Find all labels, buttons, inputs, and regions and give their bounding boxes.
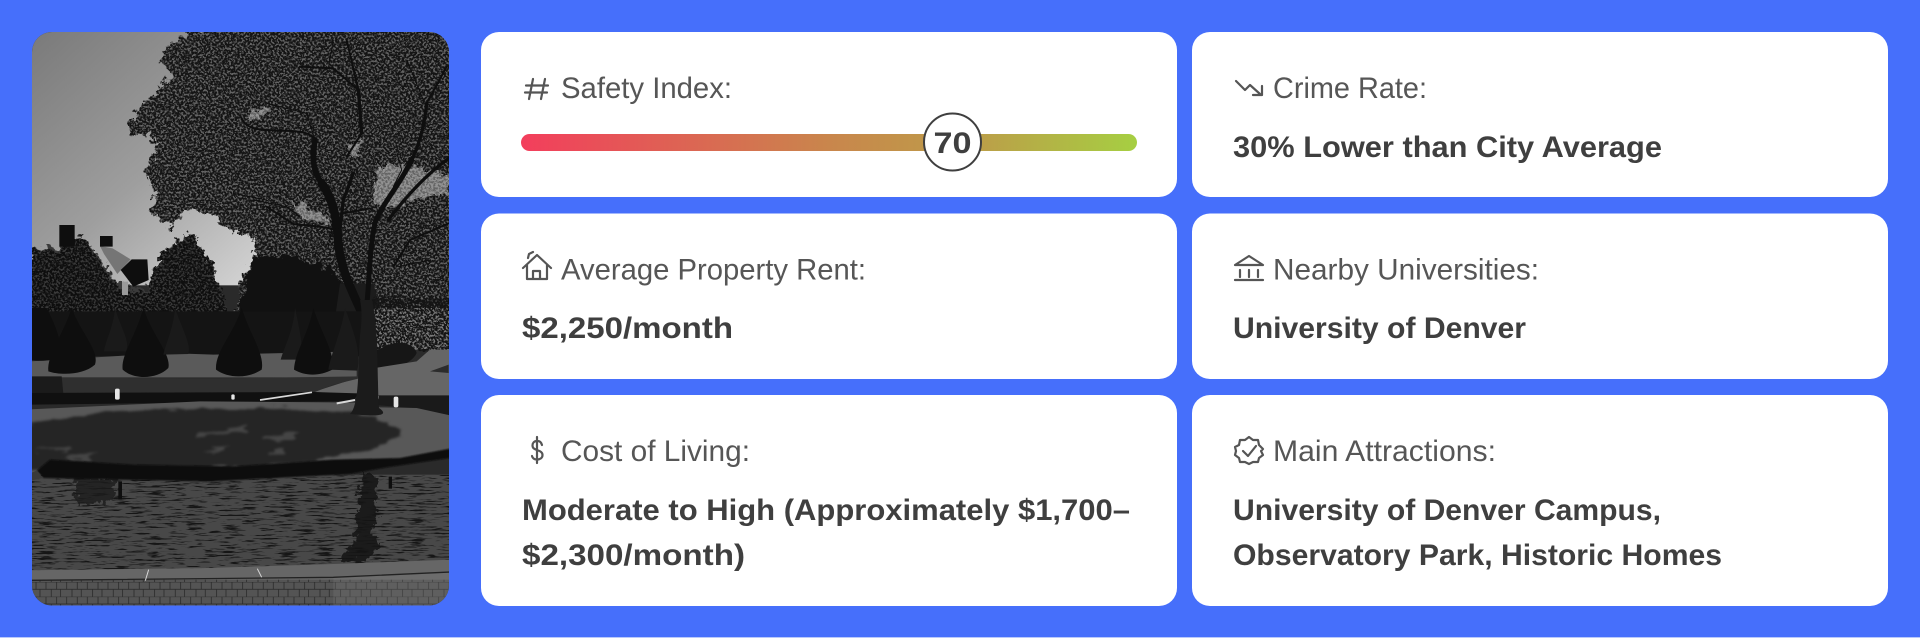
retaining wall xyxy=(294,376,358,392)
value: main attractions xyxy=(1233,494,1722,572)
right shrubs xyxy=(373,308,450,350)
label: cost of living: Cost of Living: xyxy=(561,435,750,468)
label: average property rent: Average Property Rent: xyxy=(561,254,866,286)
icon: trending down xyxy=(1236,81,1262,95)
tree trunk xyxy=(350,300,383,415)
value: crime rate: 30% Lower than City Average xyxy=(1233,131,1662,164)
value: main attractions: University of Denver Campus, xyxy=(1233,494,1661,527)
value: cost of living xyxy=(522,494,1130,572)
label: main attractions: Main Attractions: xyxy=(1273,435,1496,468)
hedge row xyxy=(30,311,375,356)
photo: park with tree and pond xyxy=(20,27,460,610)
distant trees and house xyxy=(32,225,227,312)
label: nearby universities: Nearby Universities: xyxy=(1273,254,1539,286)
label: safety index: Safety Index: xyxy=(561,72,732,105)
sky gaps in canopy xyxy=(248,108,449,223)
water xyxy=(30,475,450,573)
panel: nearby universities xyxy=(1192,214,1888,379)
icon: university building xyxy=(1235,256,1263,280)
shore shadow xyxy=(37,449,450,481)
tree canopy xyxy=(132,27,460,330)
icon: hash xyxy=(525,79,548,99)
curb and paving xyxy=(30,560,450,581)
photo base xyxy=(32,32,449,606)
slider marker xyxy=(924,114,981,170)
value: property rent: $2,250/month xyxy=(522,312,733,345)
white markers xyxy=(115,389,398,407)
panel: cost of living xyxy=(481,395,1177,606)
sky xyxy=(32,32,449,285)
value: main attractions: Observatory Park, Historic Homes xyxy=(1233,539,1722,572)
label: crime rate: Crime Rate: xyxy=(1273,72,1427,105)
value: universities: University of Denver xyxy=(1233,312,1526,345)
slider marker: 70 xyxy=(934,127,972,160)
lawn and path xyxy=(30,351,357,377)
main lawn xyxy=(30,401,450,477)
panel: crime rate xyxy=(1192,32,1888,197)
panel: average property rent xyxy=(481,214,1177,379)
value: cost of living: $2,300/month) xyxy=(522,539,745,572)
panel: main attractions xyxy=(1192,395,1888,606)
panel: safety index xyxy=(481,32,1177,197)
slider bar xyxy=(521,134,1137,151)
tree branches xyxy=(233,40,449,320)
lawn shadows xyxy=(20,407,403,470)
dark edge strip and lawn line xyxy=(30,392,358,405)
dark foliage behind trunk xyxy=(238,254,344,312)
icon: verified badge xyxy=(1235,437,1263,464)
topiary cones xyxy=(30,308,359,377)
value: cost of living: Moderate to High (Approximately $1,700– xyxy=(522,494,1130,527)
icon: house xyxy=(523,252,551,279)
icon: dollar xyxy=(532,437,542,463)
